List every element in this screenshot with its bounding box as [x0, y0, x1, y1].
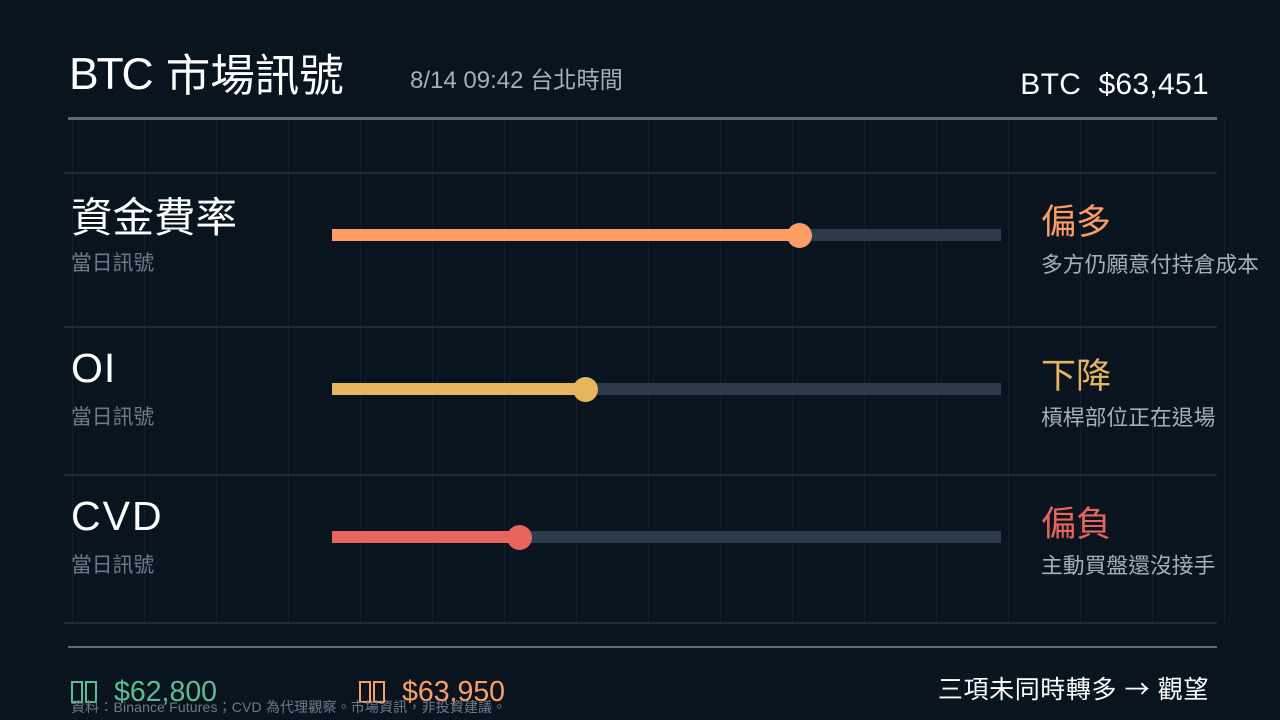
row caption: 當日訊號	[71, 252, 154, 275]
signal description: 主動買盤還沒接手	[1041, 553, 1215, 578]
gauge	[332, 229, 1001, 241]
text: $62,800	[114, 676, 217, 708]
signal: 下降	[1041, 357, 1111, 396]
gauge	[332, 383, 1001, 395]
resistance level	[359, 676, 505, 708]
signal description: 槓桿部位正在退場	[1041, 405, 1215, 430]
timestamp: 8/14 09:42 台北時間	[410, 67, 623, 94]
row name: 資金費率	[71, 194, 237, 241]
row caption: 當日訊號	[71, 554, 154, 577]
gauge	[332, 531, 1001, 543]
row: funding rate	[71, 194, 1259, 277]
conclusion: 三項未同時轉多 → 觀望	[938, 670, 1209, 706]
gauge fill	[332, 229, 799, 241]
signal description: 多方仍願意付持倉成本	[1041, 252, 1259, 277]
gauge marker	[507, 524, 532, 550]
gauge fill	[332, 383, 586, 395]
signal: 偏多	[1041, 203, 1111, 242]
BTC price: BTC $63,451	[1020, 68, 1209, 101]
source note: 資料：Binance Futures；CVD 為代理觀察。市場資訊，非投資建議。	[71, 699, 506, 715]
row caption: 當日訊號	[71, 406, 154, 429]
row name: OI	[71, 345, 116, 391]
title: BTC 市場訊號	[69, 50, 344, 101]
row: OI	[71, 345, 1215, 430]
signal: 偏負	[1041, 505, 1111, 544]
gauge marker	[787, 222, 812, 248]
row name: CVD	[71, 493, 164, 539]
row: CVD	[71, 493, 1215, 578]
text: $63,950	[402, 676, 505, 708]
gauge marker	[573, 376, 598, 402]
gauge fill	[332, 531, 519, 543]
support level	[71, 676, 217, 708]
